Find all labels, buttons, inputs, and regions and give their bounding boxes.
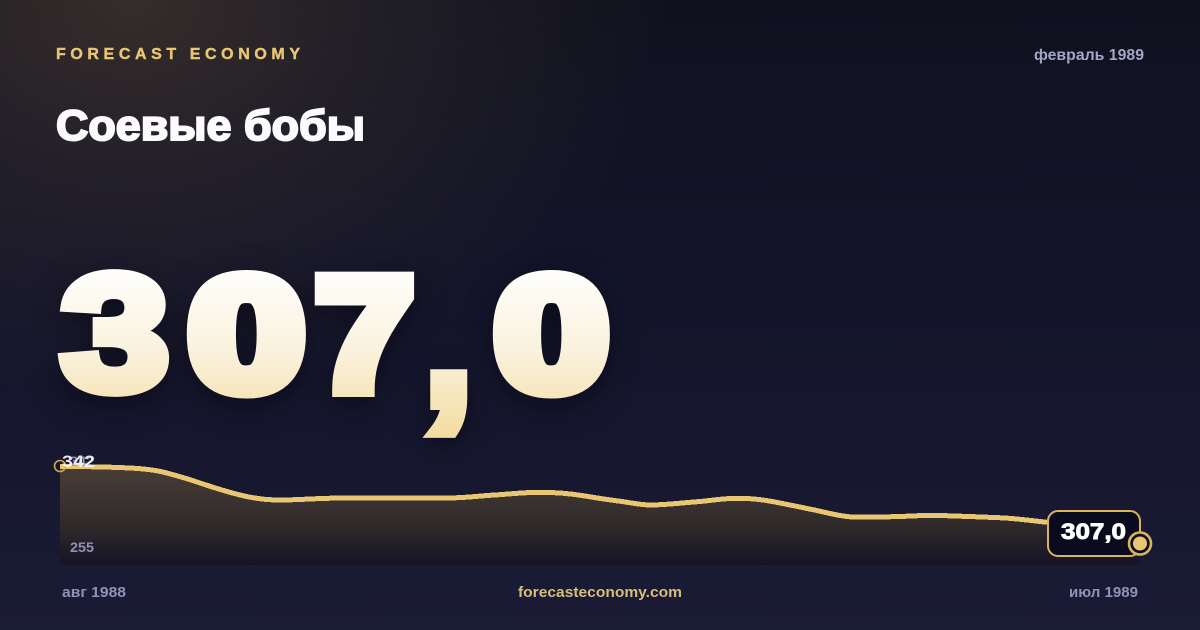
big value [61,241,608,442]
chart [54,452,1151,565]
area fill [60,466,1140,565]
website: forecasteconomy.com [518,584,682,601]
end date: июл 1989 [1069,584,1138,601]
end marker [1129,532,1151,554]
big value: 3 [61,241,169,424]
title: Соевые бобы [56,102,365,150]
big value: , [425,241,472,442]
start marker [54,460,66,472]
big value: 0 [495,245,608,423]
max value label: 342 [62,452,95,471]
max value label muted: 342 [70,453,94,469]
date label: февраль 1989 [1034,47,1144,64]
price line [60,466,1047,522]
min value label: 255 [70,539,94,555]
start date: авг 1988 [62,584,126,601]
brand label: FORECAST ECONOMY [56,46,300,63]
current value callout: 307,0 [1061,519,1126,544]
big value: 7 [316,245,413,423]
big value: 0 [189,245,304,423]
current value callout [1048,511,1140,556]
